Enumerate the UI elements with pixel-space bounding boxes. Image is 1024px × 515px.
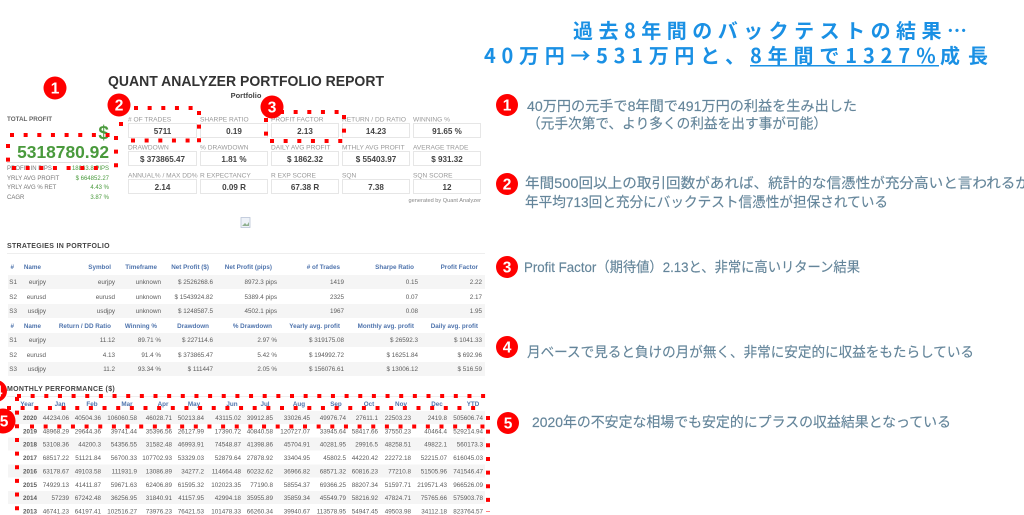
- total profit block: YRLY AVG % RET: [7, 185, 57, 191]
- section: strategies in portfolio: 2.22: [470, 279, 482, 286]
- note 5: 5: [504, 416, 513, 432]
- section: monthly performance table: Dec: [431, 401, 443, 408]
- section: strategies in portfolio: 1967: [330, 308, 344, 315]
- section: strategies in portfolio: $ 1041.33: [454, 337, 482, 344]
- section: monthly performance table: 44220.42: [352, 455, 378, 462]
- section: monthly performance table: 2016: [23, 468, 37, 476]
- section: monthly performance table: 41157.95: [178, 495, 204, 502]
- section: strategies in portfolio: S3: [9, 366, 17, 373]
- section: strategies in portfolio: usdjpy: [28, 366, 47, 373]
- section: monthly performance table: 46028.71: [146, 415, 172, 422]
- icon: broken image: [241, 218, 250, 228]
- section: strategies in portfolio: 8972.3 pips: [244, 279, 277, 286]
- section: monthly performance table: 33404.95: [284, 455, 310, 462]
- section: monthly performance table: Sep: [330, 401, 342, 408]
- metric cards: generated by Quant Analyzer: [409, 198, 481, 204]
- total profit block: 4.43 %: [90, 185, 110, 191]
- section: monthly performance table: 77210.8: [388, 468, 411, 476]
- metric cards: $ 373865.47: [140, 155, 186, 164]
- section: monthly performance table: YTD: [467, 401, 480, 408]
- section: monthly performance table: 575903.78: [453, 495, 483, 502]
- section: strategies in portfolio: 0.08: [406, 308, 418, 315]
- note 5: 2020年の不安定な相場でも安定的にプラスの収益結果となっている: [532, 414, 951, 430]
- section: monthly performance table: 61595.32: [178, 482, 204, 489]
- callout: dotted highlight around monthly table: [7, 396, 488, 512]
- heading: backtest result: [484, 15, 988, 69]
- section: strategies in portfolio: # of Trades: [307, 264, 340, 271]
- section: monthly performance table: 39912.85: [247, 415, 273, 422]
- section: monthly performance table: 29916.5: [355, 442, 378, 448]
- note 1: （元手次第で、より多くの利益を出す事が可能）: [527, 116, 827, 132]
- section: strategies in portfolio: 93.34 %: [138, 366, 161, 373]
- section: monthly performance table: 114664.48: [212, 468, 241, 476]
- section: monthly performance table: 2015: [23, 482, 37, 489]
- note 3: Profit Factor（期待値）2.13と、非常に高いリターン結果: [524, 259, 860, 275]
- section: strategies in portfolio: $ 692.96: [457, 352, 482, 359]
- section: monthly performance table: 60816.23: [352, 468, 378, 476]
- section: strategies in portfolio: eurusd: [96, 294, 115, 301]
- section: strategies in portfolio: #: [10, 323, 14, 330]
- badge 2 on report: [108, 94, 130, 116]
- section: strategies in portfolio: 1419: [330, 279, 344, 286]
- section: monthly performance table: 58216.92: [352, 495, 378, 502]
- section: monthly performance table: MONTHLY PERFORMANCE ($): [7, 386, 115, 393]
- section: strategies in portfolio: 11.12: [100, 337, 115, 344]
- total profit block: 18863.8 PIPS: [72, 166, 109, 172]
- report subtitle: Portfolio: [231, 91, 262, 100]
- metric cards: $ 55403.97: [356, 155, 397, 164]
- section: strategies in portfolio: 89.71 %: [138, 337, 161, 344]
- section: strategies in portfolio: 5389.4 pips: [244, 294, 277, 301]
- section: strategies in portfolio: Drawdown: [177, 323, 209, 330]
- section: monthly performance table: 63178.67: [43, 468, 69, 476]
- section: monthly performance table: 22503.23: [385, 415, 411, 422]
- section: monthly performance table: 27878.92: [247, 455, 273, 462]
- note 3: 3: [503, 260, 512, 276]
- section: monthly performance table: Aug: [293, 401, 305, 408]
- metric cards: 0.09 R: [222, 183, 246, 192]
- metric cards: $ 1862.32: [287, 155, 323, 164]
- section: monthly performance table: 44234.06: [43, 415, 69, 422]
- section: monthly performance table: 35396.56: [146, 428, 172, 436]
- section: strategies in portfolio: eurusd: [27, 352, 46, 359]
- total profit block: TOTAL PROFIT: [7, 116, 52, 123]
- badge 3 on report: 3: [268, 100, 277, 116]
- metric cards: ANNUAL% / MAX DD%: [128, 172, 198, 180]
- section: strategies in portfolio: eurjpy: [29, 337, 47, 344]
- section: monthly performance table: 36256.95: [111, 495, 137, 502]
- section: monthly performance table: Nov: [395, 401, 407, 408]
- section: strategies in portfolio: 4.13: [103, 352, 115, 359]
- badge 2 on report: 2: [115, 98, 123, 114]
- section: monthly performance table: Jun: [226, 401, 238, 408]
- section: monthly performance table: 68571.32: [320, 468, 346, 476]
- section: strategies in portfolio: $ 2526268.6: [178, 279, 213, 286]
- metric cards: SQN SCORE: [413, 172, 453, 180]
- section: monthly performance table: 37550.23: [385, 428, 411, 436]
- section: strategies in portfolio: Yearly avg. profit: [289, 323, 341, 330]
- section: monthly performance table: 2020: [23, 415, 37, 422]
- section: strategies in portfolio: unknown: [136, 308, 161, 315]
- section: monthly performance table: 22272.18: [385, 455, 411, 462]
- section: monthly performance table: 48968.29: [43, 428, 69, 436]
- section: monthly performance table: 13086.89: [146, 468, 172, 476]
- metric cards: [128, 116, 481, 204]
- metric cards: 91.65 %: [432, 127, 462, 136]
- panel: portfolio report: [7, 73, 485, 515]
- section: monthly performance table: 45549.79: [320, 495, 346, 502]
- section: strategies in portfolio: 2325: [330, 294, 344, 301]
- section: monthly performance table: May: [188, 401, 201, 408]
- section: strategies in portfolio: eurjpy: [29, 279, 47, 286]
- section: strategies in portfolio: $ 1248587.5: [178, 308, 213, 315]
- heading: backtest result: 8年間で1327％: [750, 40, 936, 69]
- section: monthly performance table: 106060.58: [107, 415, 137, 422]
- section: strategies in portfolio: unknown: [136, 294, 161, 301]
- section: monthly performance table: 49976.74: [320, 415, 346, 422]
- section: monthly performance table: 505606.74: [453, 415, 483, 422]
- total profit block: $ 664852.27: [76, 176, 110, 182]
- section: strategies in portfolio: $ 319175.08: [309, 337, 344, 344]
- section: monthly performance table: 53329.03: [178, 455, 204, 462]
- section: strategies in portfolio: Daily avg. profit: [431, 323, 479, 330]
- callout: dotted highlight around trades: [121, 108, 199, 145]
- section: strategies in portfolio: S1: [9, 279, 17, 286]
- section: strategies in portfolio: Name: [24, 323, 41, 330]
- section: monthly performance table: 45704.91: [284, 442, 310, 448]
- section: monthly performance table: 29644.36: [75, 428, 101, 436]
- metric cards: MTHLY AVG PROFIT: [342, 144, 405, 152]
- total profit block: 5318780.92: [17, 142, 109, 162]
- section: strategies in portfolio: $ 516.59: [457, 366, 482, 373]
- callout: dotted highlight around profit factor: [266, 112, 345, 141]
- section: monthly performance table: 33945.64: [320, 428, 346, 436]
- section: monthly performance table: 40281.95: [320, 442, 346, 448]
- section: strategies in portfolio: Winning %: [125, 323, 157, 330]
- section: monthly performance table: 120727.07: [280, 428, 310, 436]
- section: monthly performance table: 33026.45: [284, 415, 310, 422]
- section: monthly performance table: 51505.96: [421, 468, 447, 476]
- section: strategies in portfolio: STRATEGIES IN PORTFOLIO: [7, 243, 110, 250]
- section: strategies in portfolio: 0.07: [406, 294, 418, 301]
- section: strategies in portfolio: S3: [9, 308, 17, 315]
- note 4: 4: [503, 340, 512, 356]
- section: monthly performance table: 56700.33: [111, 455, 137, 462]
- section: monthly performance table: 40504.36: [75, 415, 101, 422]
- section: strategies in portfolio: Monthly avg. profit: [358, 323, 415, 330]
- section: strategies in portfolio: 0.15: [406, 279, 418, 286]
- note 1: [496, 94, 857, 132]
- section: monthly performance table: 51121.84: [75, 455, 101, 462]
- section: strategies in portfolio: Symbol: [88, 264, 111, 271]
- total profit block: [7, 116, 110, 201]
- section: monthly performance table: 107702.93: [142, 455, 172, 462]
- section: monthly performance table: 58554.37: [284, 482, 310, 489]
- section: strategies in portfolio: 2.97 %: [257, 337, 277, 344]
- section: monthly performance table: 17390.72: [215, 428, 241, 436]
- section: strategies in portfolio: eurusd: [27, 294, 46, 301]
- section: monthly performance table: 31840.91: [146, 495, 172, 502]
- heading: backtest result: 40万円→531万円と、: [484, 40, 745, 69]
- section: strategies in portfolio: #: [10, 264, 14, 271]
- total profit block: 3.87 %: [90, 195, 110, 201]
- section: monthly performance table: 41411.87: [75, 482, 101, 489]
- section: strategies in portfolio: 2.05 %: [257, 366, 277, 373]
- note 1: 1: [503, 98, 512, 114]
- note 1: 40万円の元手で8年間で491万円の利益を生み出した: [527, 98, 857, 114]
- section: strategies in portfolio: Name: [24, 264, 41, 271]
- total profit block: PROFIT IN PIPS: [7, 166, 52, 172]
- section: strategies in portfolio: $ 373865.47: [178, 352, 213, 359]
- section: strategies in portfolio: Sharpe Ratio: [375, 264, 414, 271]
- section: monthly performance table: 34277.2: [181, 468, 204, 476]
- section: strategies in portfolio: $ 16251.84: [386, 352, 418, 359]
- metric cards: SQN: [342, 172, 357, 180]
- callout: dotted highlight around total profit: [8, 135, 116, 170]
- metric cards: $ 931.32: [431, 155, 463, 164]
- section: strategies in portfolio: Return / DD Ratio: [59, 323, 111, 330]
- section: monthly performance table: 741546.47: [453, 468, 483, 476]
- section: monthly performance table: 57239: [51, 495, 69, 502]
- note 2: 2: [503, 176, 511, 194]
- section: monthly performance table: 69366.25: [320, 482, 346, 489]
- note 5: [497, 412, 951, 434]
- section: monthly performance table: 47824.71: [385, 495, 411, 502]
- note 2: 年平均713回と充分にバックテスト信憑性が担保されている: [525, 194, 888, 210]
- section: monthly performance table: 31582.48: [146, 442, 172, 448]
- section: strategies in portfolio: unknown: [136, 279, 161, 286]
- section: monthly performance table: 59671.63: [111, 482, 137, 489]
- section: monthly performance table: 74929.13: [43, 482, 69, 489]
- metric cards: 7.38: [368, 183, 384, 192]
- section: monthly performance table: 52215.07: [421, 455, 447, 462]
- metric cards: 14.23: [366, 127, 387, 136]
- metric cards: PROFIT FACTOR: [271, 116, 324, 124]
- section: monthly performance table: 51597.71: [385, 482, 411, 489]
- section: monthly performance table: 35955.89: [247, 495, 273, 502]
- section: strategies in portfolio: 5.42 %: [257, 352, 277, 359]
- heading: backtest result: 成長: [940, 40, 988, 69]
- section: monthly performance table: 35859.34: [284, 495, 310, 502]
- section: strategies in portfolio: Net Profit (pips): [225, 264, 272, 271]
- section: monthly performance table: 966526.09: [453, 482, 483, 489]
- section: strategies in portfolio: eurjpy: [98, 279, 116, 286]
- section: strategies in portfolio: $ 26592.3: [390, 337, 418, 344]
- section: monthly performance table: 41398.86: [247, 442, 273, 448]
- section: monthly performance table: 46993.91: [178, 442, 204, 448]
- note 2: [496, 173, 1024, 210]
- section: monthly performance table: 40464.4: [424, 428, 447, 436]
- section: monthly performance table: 2017: [23, 455, 37, 462]
- metric cards: SHARPE RATIO: [200, 116, 249, 124]
- metric cards: RETURN / DD RATIO: [342, 116, 406, 124]
- section: monthly performance table: 50213.84: [178, 415, 204, 422]
- metric cards: DAILY AVG PROFIT: [271, 144, 330, 152]
- note 4: [496, 336, 974, 360]
- section: monthly performance table: 2018: [23, 442, 37, 448]
- section: monthly performance table: 62406.89: [146, 482, 172, 489]
- section: strategies in portfolio: S1: [9, 337, 17, 344]
- badge 1 on report: 1: [51, 80, 60, 98]
- section: strategies in portfolio: usdjpy: [97, 308, 116, 315]
- metric cards: 2.13: [297, 127, 313, 136]
- section: monthly performance table: 77190.8: [250, 482, 273, 489]
- metric cards: 12: [442, 183, 452, 192]
- section: monthly performance table: 111931.9: [112, 468, 137, 476]
- section: strategies in portfolio: 1.95: [470, 308, 482, 315]
- section: monthly performance table: 43115.02: [215, 415, 241, 422]
- section: strategies in portfolio: usdjpy: [28, 308, 47, 315]
- metric cards: AVERAGE TRADE: [413, 144, 469, 152]
- section: strategies in portfolio: $ 111447: [188, 366, 213, 373]
- metric cards: WINNING %: [413, 116, 450, 124]
- section: monthly performance table: 616045.03: [453, 455, 483, 462]
- badge 4 on report: [0, 380, 7, 402]
- metric cards: % DRAWDOWN: [200, 144, 249, 152]
- total profit block: $: [98, 123, 109, 144]
- section: monthly performance table: 2014: [23, 495, 37, 502]
- total profit block: CAGR: [7, 195, 25, 201]
- section: monthly performance table: 60232.62: [247, 468, 273, 476]
- section: monthly performance table: 42994.18: [215, 495, 241, 502]
- section: monthly performance table: 48258.51: [385, 442, 411, 448]
- metric cards: 67.38 R: [291, 183, 319, 192]
- section: monthly performance table: Jan: [55, 401, 66, 408]
- note 4: 月ベースで見ると負けの月が無く、非常に安定的に収益をもたらしている: [527, 344, 974, 360]
- note 3: [496, 256, 860, 278]
- section: strategies in portfolio: 2.17: [470, 294, 482, 301]
- metric cards: R EXP SCORE: [271, 172, 317, 180]
- section: monthly performance table: 560173.3: [457, 442, 483, 448]
- section: strategies in portfolio: $ 1543924.82: [174, 294, 213, 301]
- section: monthly performance table: 44200.3: [78, 442, 101, 448]
- section: monthly performance table: 45802.5: [323, 455, 346, 462]
- section: monthly performance table: Apr: [158, 401, 169, 408]
- section: monthly performance table: 219571.43: [417, 482, 447, 489]
- section: monthly performance table: 49822.1: [424, 442, 447, 448]
- section: monthly performance table: 49103.58: [75, 468, 101, 476]
- metric cards: DRAWDOWN: [128, 144, 169, 152]
- section: strategies in portfolio: Timeframe: [125, 264, 157, 271]
- section: strategies in portfolio: 4502.1 pips: [244, 308, 277, 315]
- section: strategies in portfolio: S2: [9, 294, 17, 301]
- section: monthly performance table: 58417.66: [352, 428, 378, 436]
- section: monthly performance table: 52879.64: [215, 455, 241, 462]
- section: strategies in portfolio: $ 13006.12: [386, 366, 418, 373]
- section: monthly performance table: Mar: [121, 401, 133, 408]
- metric cards: 2.14: [155, 183, 171, 192]
- section: monthly performance table: 102023.35: [211, 482, 241, 489]
- section: strategies in portfolio: [7, 243, 485, 376]
- section: monthly performance table: 36966.82: [284, 468, 310, 476]
- section: monthly performance table: 88207.34: [352, 482, 378, 489]
- section: monthly performance table: 529214.94: [453, 428, 483, 436]
- section: monthly performance table: 75765.66: [421, 495, 447, 502]
- section: strategies in portfolio: 91.4 %: [141, 352, 161, 359]
- metric cards: R EXPECTANCY: [200, 172, 251, 180]
- section: strategies in portfolio: $ 227114.6: [182, 337, 213, 344]
- section: monthly performance table: 2419.8: [428, 415, 447, 422]
- section: strategies in portfolio: $ 194992.72: [309, 352, 344, 359]
- section: monthly performance table: 26127.99: [178, 428, 204, 436]
- section: monthly performance table: 68517.22: [43, 455, 69, 462]
- badge 5 on report: [0, 408, 16, 434]
- section: monthly performance table: 27611.1: [356, 415, 378, 422]
- section: monthly performance table: Feb: [86, 401, 98, 408]
- total profit block: YRLY AVG PROFIT: [7, 176, 60, 182]
- heading: backtest result: 過去8年間のバックテストの結果…: [573, 15, 967, 44]
- section: strategies in portfolio: S2: [9, 352, 17, 359]
- metric cards: 1.81 %: [221, 155, 247, 164]
- section: strategies in portfolio: Profit Factor: [441, 264, 479, 271]
- section: monthly performance table: 67242.48: [75, 495, 101, 502]
- badge 1 on report: [44, 76, 66, 100]
- section: strategies in portfolio: 11.2: [103, 366, 115, 373]
- section: strategies in portfolio: $ 156076.61: [309, 366, 344, 373]
- section: monthly performance table: Oct: [364, 401, 375, 408]
- report title: QUANT ANALYZER PORTFOLIO REPORT: [108, 73, 384, 90]
- section: monthly performance table: 54356.55: [111, 442, 137, 448]
- section: monthly performance table: 74548.87: [215, 442, 241, 448]
- section: monthly performance table: Year: [20, 401, 34, 408]
- note 2: 年間500回以上の取引回数があれば、統計的な信憑性が充分高いと言われるが: [525, 175, 1024, 191]
- section: monthly performance table: [7, 386, 485, 515]
- section: monthly performance table: 2019: [23, 428, 37, 436]
- metric cards: # OF TRADES: [128, 116, 172, 124]
- section: strategies in portfolio: % Drawdown: [233, 323, 272, 330]
- section: monthly performance table: 40840.58: [247, 428, 273, 436]
- section: monthly performance table: 53108.36: [43, 442, 69, 448]
- section: strategies in portfolio: Net Profit ($): [171, 264, 209, 271]
- section: monthly performance table: 39741.44: [111, 428, 137, 436]
- metric cards: 0.19: [226, 127, 242, 136]
- badge 3 on report: [260, 96, 284, 118]
- section: monthly performance table: Jul: [260, 401, 270, 408]
- metric cards: 5711: [154, 127, 172, 136]
